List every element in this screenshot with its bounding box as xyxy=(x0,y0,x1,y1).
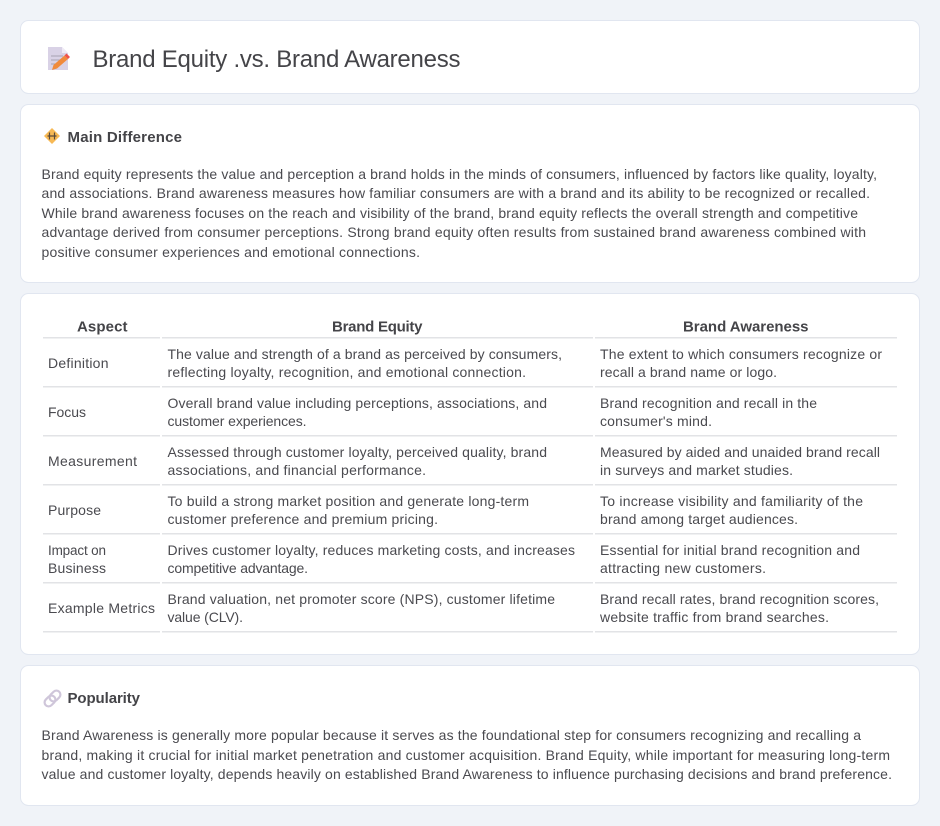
text block: main difference paragraph xyxy=(42,166,877,260)
table row: focus: Focus xyxy=(48,404,86,420)
table header row: Aspect xyxy=(77,318,128,336)
table row: purpose: To increase visibility and familiarity of the xyxy=(600,493,863,509)
heading: main difference: Main Difference xyxy=(68,129,182,146)
table header row xyxy=(43,318,897,338)
table header row: Brand Awareness xyxy=(683,318,808,336)
table row: impact on business: attracting new customers. xyxy=(600,560,766,576)
text block: popularity paragraph: brand, making it crucial for initial market penetration and customer acquisition. Brand Equity, while important for measuring long-term xyxy=(42,747,890,763)
text block: popularity paragraph xyxy=(42,727,892,782)
table row: measurement: Measurement xyxy=(48,453,137,469)
text block: popularity paragraph: value and customer loyalty, depends heavily on established Brand Awareness to influence purchasing decisions and brand preference. xyxy=(42,766,892,782)
table row: example metrics xyxy=(43,591,897,632)
panel: main difference xyxy=(20,104,920,282)
table row: purpose: Purpose xyxy=(48,502,101,518)
panel: comparison table xyxy=(20,294,920,654)
table row: focus: customer experiences. xyxy=(168,413,306,429)
table row: definition: Definition xyxy=(48,355,108,371)
table row: purpose: customer preference and premium pricing. xyxy=(168,511,438,527)
table row: definition: The value and strength of a brand as perceived by consumers, xyxy=(168,346,562,362)
table row: measurement: Measured by aided and unaided brand recall xyxy=(600,444,880,460)
table row: measurement: associations, and financial performance. xyxy=(168,462,426,478)
table row: definition: reflecting loyalty, recognition, and emotional connection. xyxy=(168,364,526,380)
text block: main difference paragraph: While brand awareness focuses on the reach and visibility of the brand, brand equity reflects the overall strength and competitive xyxy=(42,205,858,221)
table row: purpose: brand among target audiences. xyxy=(600,511,798,527)
table row: focus: Brand recognition and recall in the xyxy=(600,395,817,411)
text block: main difference paragraph: Brand equity represents the value and perception a brand holds in the minds of consumers, influenced by factors like quality, loyalty, xyxy=(42,166,877,182)
table row: measurement xyxy=(43,444,897,486)
table row: example metrics: Brand valuation, net promoter score (NPS), customer lifetime xyxy=(168,591,555,607)
text block: popularity paragraph: Brand Awareness is generally more popular because it serves as the foundational step for consumers recognizing and recalling a xyxy=(42,727,861,743)
table row: impact on business xyxy=(43,542,897,584)
table row: purpose xyxy=(43,493,897,534)
text block: main difference paragraph: advantage derived from consumer perceptions. Strong brand equity often results from sustained brand awareness combined with xyxy=(42,224,866,240)
table row: impact on business: Drives customer loyalty, reduces marketing costs, and increases xyxy=(168,542,575,558)
table row: impact on business: Business xyxy=(48,560,106,576)
text block: main difference paragraph: positive consumer experiences and emotional connections. xyxy=(42,244,420,260)
table row: focus: consumer's mind. xyxy=(600,413,712,429)
table row: focus: Overall brand value including perceptions, associations, and xyxy=(168,395,547,411)
table row: example metrics: value (CLV). xyxy=(168,609,243,625)
icon: chain link xyxy=(43,689,62,708)
icon: diamond road sign xyxy=(44,128,60,144)
table row: definition: recall a brand name or logo. xyxy=(600,364,777,380)
table header row: Brand Equity xyxy=(332,318,423,336)
table row: measurement: Assessed through customer loyalty, perceived quality, brand xyxy=(168,444,547,460)
table row: measurement: in surveys and market studies. xyxy=(600,462,793,478)
table row: example metrics: Example Metrics xyxy=(48,600,155,616)
table row: definition xyxy=(43,346,897,388)
panel: popularity xyxy=(20,666,920,806)
table row: focus xyxy=(43,395,897,436)
table row: impact on business: Impact on xyxy=(48,543,106,558)
text block: main difference paragraph: and associations. Brand awareness measures how familiar consumers are with a brand and its ability to be recognized or recalled. xyxy=(42,185,870,201)
title: Brand Equity .vs. Brand Awareness xyxy=(92,46,460,73)
icon: document with pencil xyxy=(48,47,70,70)
table row: example metrics: website traffic from brand searches. xyxy=(599,609,829,625)
table row: purpose: To build a strong market position and generate long-term xyxy=(168,493,529,509)
table row: definition: The extent to which consumers recognize or xyxy=(600,346,882,362)
heading: popularity: Popularity xyxy=(68,690,141,707)
table row: impact on business: Essential for initial brand recognition and xyxy=(600,542,860,558)
table row: example metrics: Brand recall rates, brand recognition scores, xyxy=(600,591,879,607)
table row: impact on business: competitive advantage. xyxy=(168,560,308,576)
panel: title header xyxy=(20,20,920,94)
